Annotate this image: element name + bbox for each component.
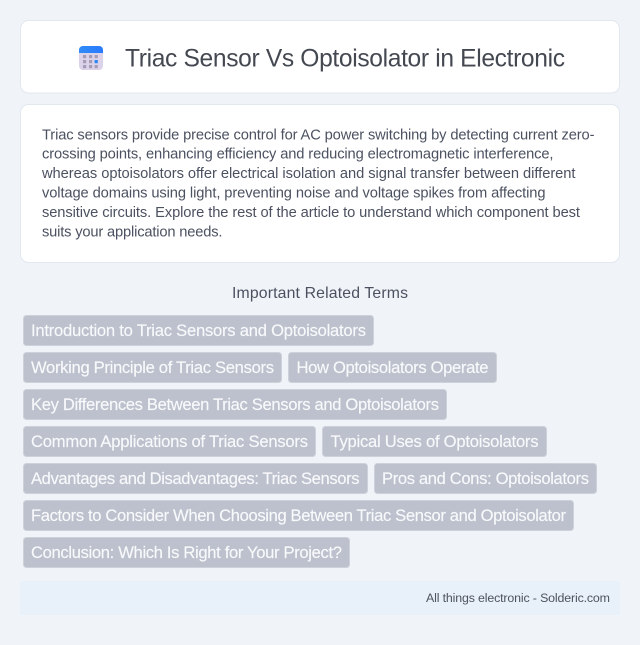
tag: factors to consider: Factors to Consider When Choosing Between Triac Sensor and Optoisolator [31,506,566,525]
text block: summary: suits your application needs. [42,224,222,240]
tag: factors to consider [24,500,574,530]
panel: header [20,20,620,93]
text block: summary: voltage domains using light, preventing noise and voltage spikes from affecting [42,186,546,202]
tag: key differences: Key Differences Between Triac Sensors and Optoisolators [31,395,439,414]
tag: working principle: Working Principle of Triac Sensors [31,358,274,377]
text block: summary: crossing points, enhancing efficiency and reducing electromagnetic interference, [42,147,554,163]
tag: advantages and disadvantages [24,464,368,494]
tag: advantages and disadvantages: Advantages and Disadvantages: Triac Sensors [31,469,360,488]
tag: conclusion: Conclusion: Which Is Right for Your Project? [31,543,342,562]
title: Triac Sensor Vs Optoisolator in Electronic [125,46,565,72]
text block: summary: whereas optoisolators offer electrical isolation and signal transfer between different [41,166,576,182]
tag: how optoisolators operate: How Optoisolators Operate [296,358,488,377]
tag: typical uses: Typical Uses of Optoisolators [330,432,538,451]
tag: typical uses [322,426,546,456]
panel: summary paragraph [20,104,620,262]
tag: key differences [24,390,446,420]
footer [20,581,620,615]
heading: related terms: Important Related Terms [232,285,408,302]
tag: pros and cons: Pros and Cons: Optoisolators [382,469,589,488]
text block: summary [41,127,595,240]
tag: common applications [24,426,316,456]
tag: conclusion [24,538,350,568]
tag: pros and cons [374,464,596,494]
text block: summary: Triac sensors provide precise control for AC power switching by detecting current zero- [42,127,595,143]
tag: working principle [24,352,282,382]
footer credit: All things electronic - Solderic.com [426,591,610,605]
tag: how optoisolators operate [288,352,496,382]
tag: introduction: Introduction to Triac Sensors and Optoisolators [31,321,366,340]
tag: common applications: Common Applications of Triac Sensors [31,432,308,451]
tag: introduction [24,316,374,346]
icon: calendar grid [79,46,103,70]
tag list [24,316,596,568]
text block: summary: sensitive circuits. Explore the rest of the article to understand which component best [42,205,580,221]
